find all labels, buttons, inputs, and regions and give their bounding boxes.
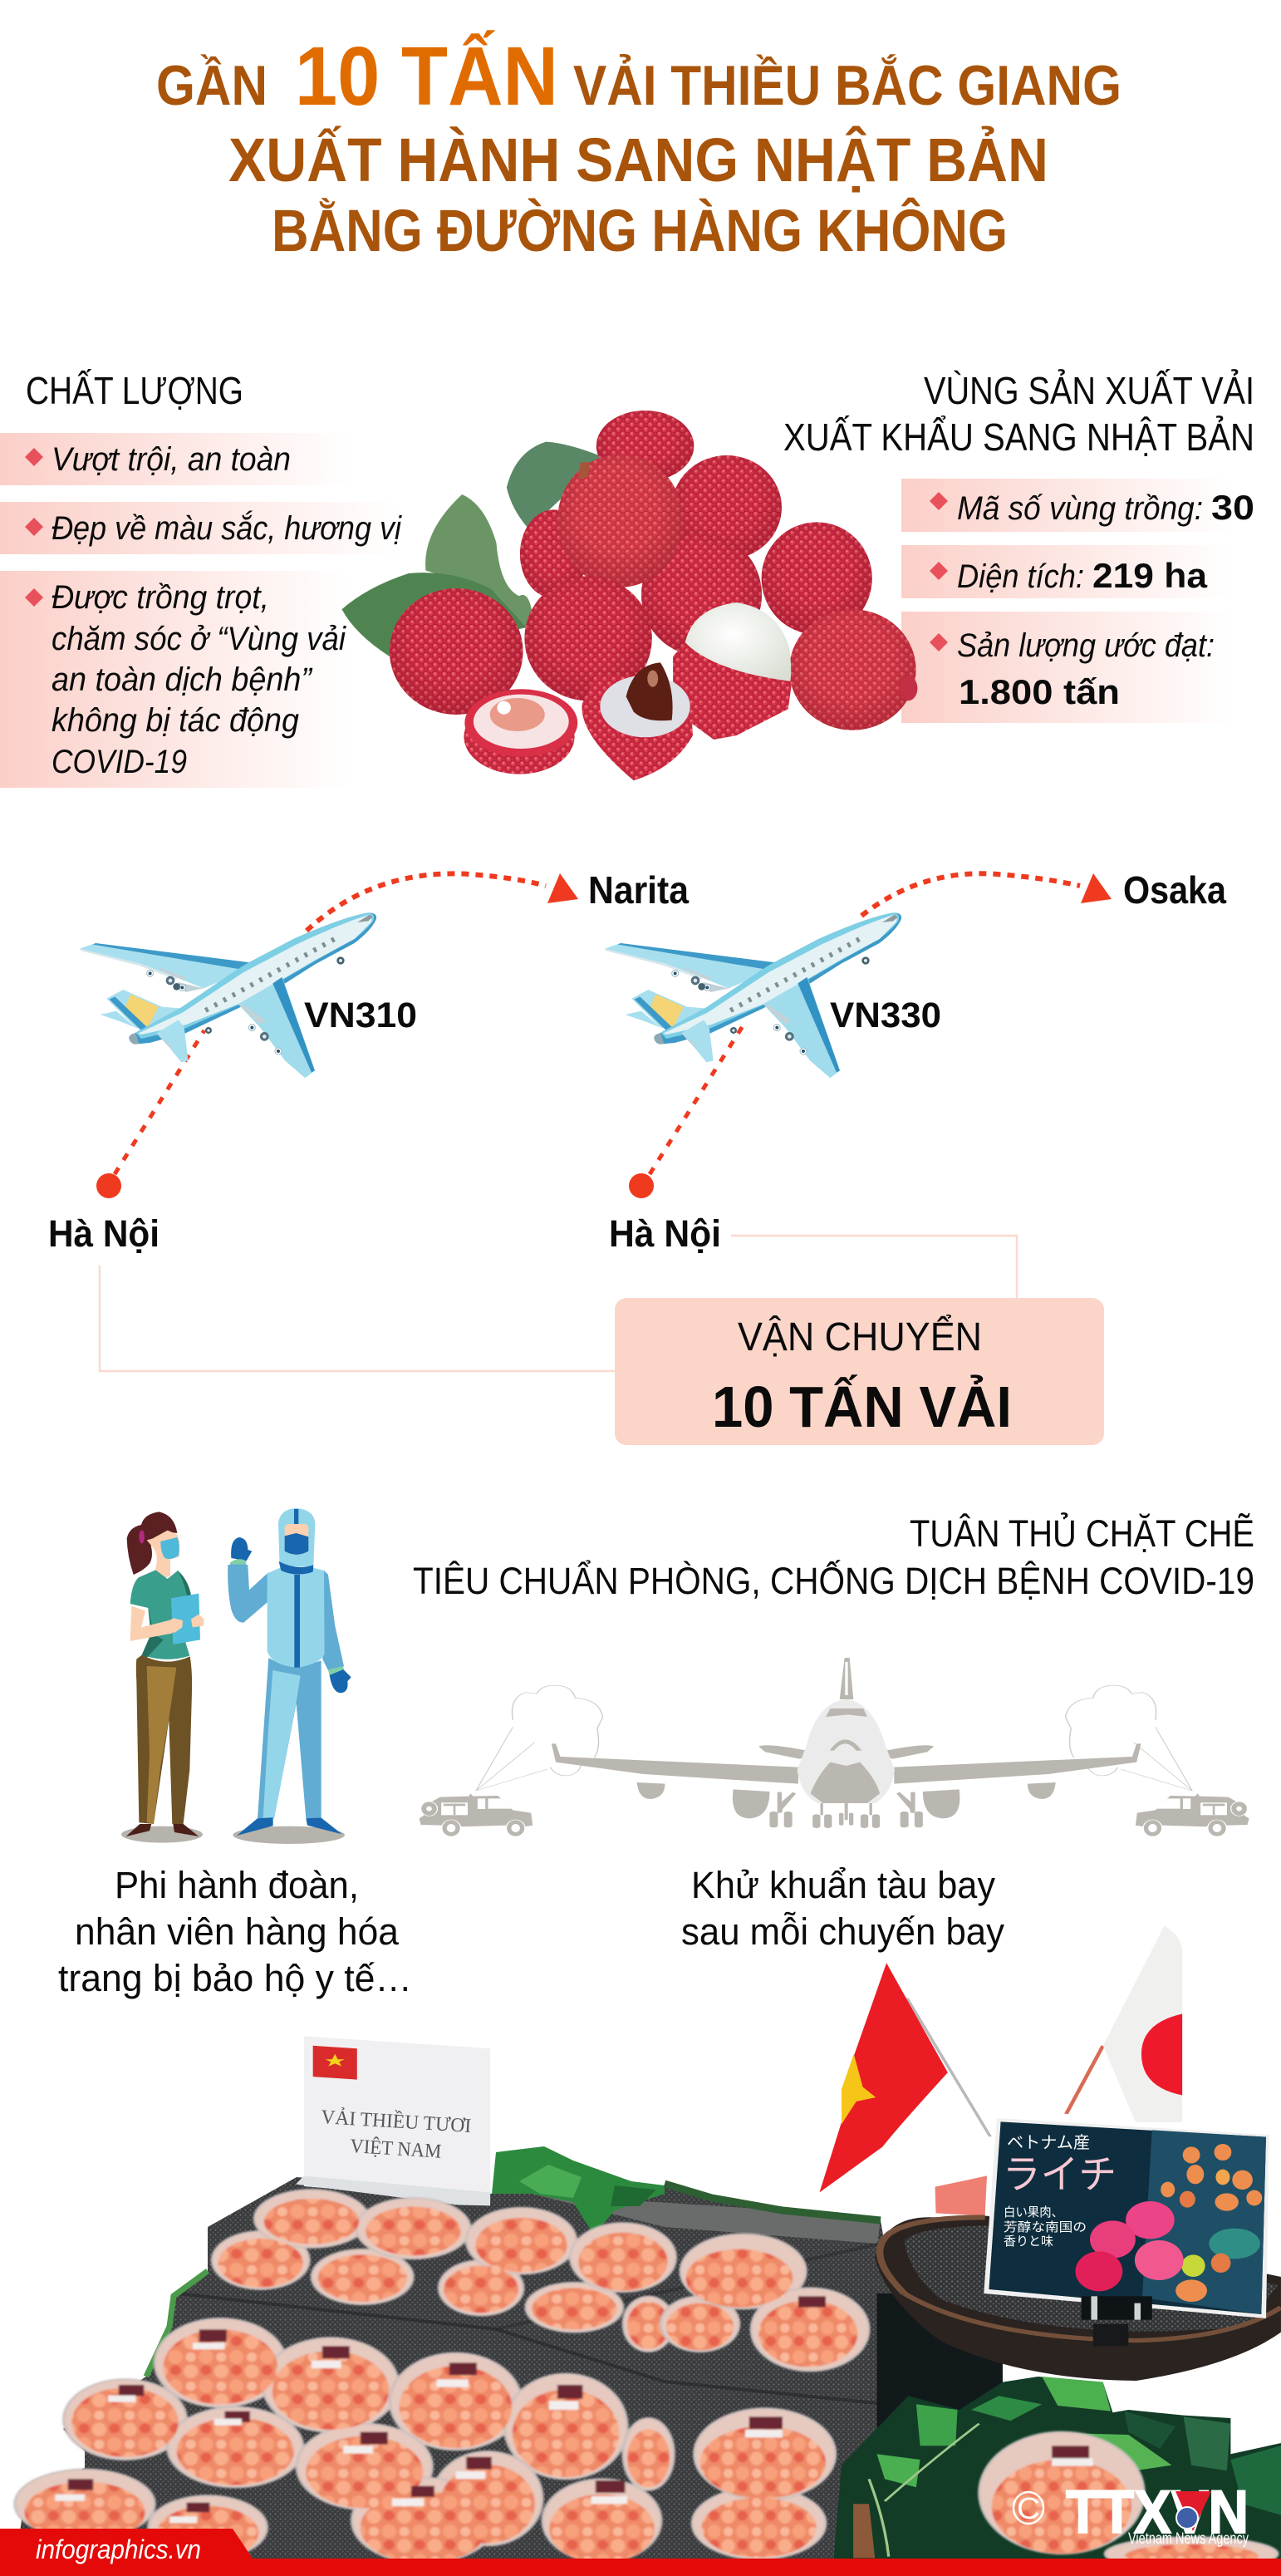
production figures: Sản lượng ước đạt: [957,627,1215,664]
disinfection truck right [1066,1685,1249,1836]
illustration: aircraft disinfection [420,1658,1249,1836]
sign: Vietnamese lychee: VIỆT NAM [350,2136,442,2163]
production figures: 30 [1211,488,1254,527]
quality item texts: Được trồng trọt, [52,579,269,616]
caption: crew: Phi hành đoàn, [115,1864,359,1906]
logo: TTXVN: TTXVN [1066,2479,1249,2546]
icon: airplane VN330 [605,912,901,1078]
photo: lychee display [15,1926,1281,2570]
route labels: Hà Nội [48,1212,160,1255]
caption: disinfection [681,1864,1004,1953]
poster: Japanese lychee: 香りと味 [1004,2234,1053,2249]
panel: production area [783,369,1254,723]
illustration: lychee fruits [341,410,917,780]
callout: transport volume [615,1298,1104,1445]
lychee boxes left [15,2190,676,2564]
caption: disinfection: sau mỗi chuyến bay [681,1910,1004,1953]
callout: transport volume: VẬN CHUYỂN [738,1315,982,1359]
title: XUẤT HÀNH SANG NHẬT BẢN [228,125,1048,194]
heading: quality: CHẤT LƯỢNG [26,369,243,412]
footer bar [0,2529,1281,2576]
title: VẢI THIỀU BẮC GIANG [573,53,1121,117]
caption: crew: trang bị bảo hộ y tế… [58,1957,412,1999]
heading: covid standards [413,1512,1254,1602]
title: 10 TẤN [295,29,558,123]
peeled lychee [673,602,792,740]
production figures: 219 ha [1092,556,1208,595]
poster: Japanese lychee: 白い果肉、 [1004,2205,1063,2220]
production figures: Mã số vùng trồng: [957,490,1203,527]
caption: disinfection: Khử khuẩn tàu bay [691,1864,995,1906]
production figures: 1.800 tấn [959,672,1120,711]
poster: Japanese lychee: ベトナム産 [1007,2133,1090,2152]
disinfection truck left [420,1685,602,1836]
lychee boxes right [660,2234,1278,2570]
illustration: crew members [121,1508,351,1844]
route labels: Hà Nội [609,1212,721,1255]
sign: Vietnamese lychee [296,2036,490,2205]
basket and pedestal [875,2175,1281,2437]
quality item texts [52,441,402,780]
quality item texts: Đẹp về màu sắc, hương vị [52,509,402,547]
lychee with seed [582,662,693,780]
sign: Vietnamese lychee: VẢI THIỀU TƯƠI [321,2106,472,2137]
poster: Japanese lychee [984,2118,1269,2346]
route labels [48,868,1226,1255]
quality item texts: Vượt trội, an toàn [52,441,291,478]
icon: airplane VN310 [80,912,376,1078]
route labels: Osaka [1123,868,1226,912]
greenery lower right [833,2377,1281,2559]
halved lychee [464,689,577,774]
production figures: Diện tích: [957,558,1084,595]
logo: TTXVN: C [1017,2491,1040,2525]
Japan flag [1066,1926,1182,2122]
title [156,29,1121,264]
heading: production area [783,369,1254,459]
arrow: route Hà Nội to Narita [96,873,578,1198]
table [17,2177,893,2559]
title: BẰNG ĐƯỜNG HÀNG KHÔNG [272,198,1008,264]
quality item texts: an toàn dịch bệnh” [52,661,313,698]
quality item texts: không bị tác động [52,702,299,739]
production figures [957,488,1254,711]
poster: Japanese lychee: ライチ [1003,2153,1117,2197]
route labels: VN330 [830,995,941,1035]
woman [126,1512,204,1836]
source label: infographics.vn [36,2534,201,2564]
caption: crew [58,1864,412,1999]
leaves on table [492,2146,881,2235]
route labels: Narita [588,868,689,912]
Vietnam flag [819,1963,990,2192]
title: GẦN [156,53,267,117]
panel: quality [0,369,403,788]
callout: transport volume: 10 TẤN VẢI [712,1374,1012,1439]
arrow: route Hà Nội to Osaka [629,873,1112,1198]
quality item texts: chăm sóc ở “Vùng vải [52,621,346,657]
quality item texts: COVID-19 [52,744,187,780]
person in protective suit [228,1508,351,1836]
route labels: VN310 [304,995,417,1035]
caption: crew: nhân viên hàng hóa [75,1910,400,1953]
poster: Japanese lychee: 芳醇な南国の [1004,2220,1087,2234]
